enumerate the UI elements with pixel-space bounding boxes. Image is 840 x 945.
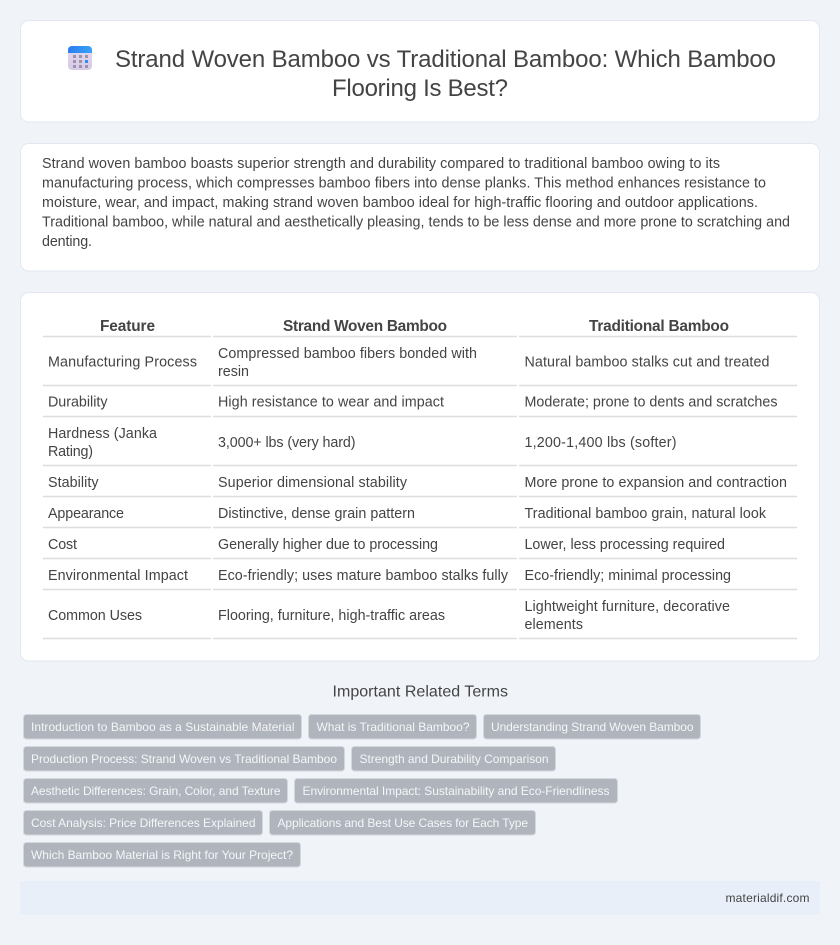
row: cost: Generally higher due to processing [218,537,438,553]
tag: Production Process: Strand Woven vs Traditional Bamboo [31,752,337,766]
tag [24,810,262,835]
row: hardness [48,426,676,460]
text block: description: moisture, wear, and impact, making strand woven bamboo ideal for high-traffic flooring and outdoor applications. [42,195,758,211]
tag [24,842,300,867]
panel: header [20,20,820,122]
row: environmental impact: Environmental Impact [48,568,188,584]
text block: description: Strand woven bamboo boasts superior strength and durability compared to traditional bamboo owing to its [42,156,720,172]
row: hardness: Hardness (Janka [48,426,157,442]
tag: Cost Analysis: Price Differences Explained [31,816,256,830]
tag: Strength and Durability Comparison [360,752,548,766]
row: hardness: 3,000+ lbs (very hard) [218,435,356,451]
row: manufacturing process: Compressed bamboo fibers bonded with [218,346,477,362]
row: stability: Stability [48,475,99,491]
tag: Introduction to Bamboo as a Sustainable Material [31,720,294,734]
row: common uses: Lightweight furniture, decorative [524,599,730,615]
panel: description [20,144,820,271]
tag group: related terms [24,714,700,867]
footer: materialdif.com [726,891,810,905]
title: Flooring Is Best? [332,75,508,102]
row: durability [48,394,778,410]
tag [24,714,302,739]
row: stability [48,475,787,491]
tag: Environmental Impact: Sustainability and Eco-Friendliness [302,784,610,798]
text block: description: manufacturing process, which compresses bamboo fibers into dense planks. This method enhances resistance to [42,176,766,192]
heading: important related terms: Important Related Terms [332,684,508,700]
row: appearance: Appearance [48,506,124,522]
row: durability: Moderate; prone to dents and scratches [524,394,778,410]
row: common uses [48,599,730,633]
row: cost: Cost [48,537,77,553]
table header row [100,318,729,335]
row: durability: Durability [48,394,108,410]
title [115,46,776,102]
text block: description [42,156,790,250]
row: stability: More prone to expansion and contraction [524,475,787,491]
row: common uses: Flooring, furniture, high-traffic areas [218,608,445,624]
tag: What is Traditional Bamboo? [316,720,470,734]
row: hardness: 1,200-1,400 lbs (softer) [524,435,676,451]
icon: calendar [68,46,92,70]
row: manufacturing process: Manufacturing Process [48,354,197,370]
tag [294,778,618,803]
row: durability: High resistance to wear and impact [218,394,444,410]
row: environmental impact [48,568,731,584]
text block: description: Traditional bamboo, while natural and aesthetically pleasing, tends to be less dense and more prone to scratching and [42,214,790,230]
tag: Which Bamboo Material is Right for Your Project? [31,848,293,862]
row: environmental impact: Eco-friendly; uses mature bamboo stalks fully [218,568,509,584]
tag [24,778,288,803]
tag: Understanding Strand Woven Bamboo [491,720,694,734]
tag [24,746,344,771]
row: common uses: elements [524,617,583,633]
panel: comparison table [20,292,820,661]
table header row: Traditional Bamboo [589,318,729,335]
table header row: Feature [100,318,155,335]
tag [308,714,476,739]
tag [484,714,700,739]
row: common uses: Common Uses [48,608,142,624]
row: cost: Lower, less processing required [524,537,725,553]
tag [352,746,556,771]
table header row: Strand Woven Bamboo [283,318,447,335]
row: manufacturing process [48,346,770,380]
tag: Applications and Best Use Cases for Each Type [278,816,528,830]
tag: Aesthetic Differences: Grain, Color, and Texture [31,784,281,798]
row: hardness: Rating) [48,444,93,460]
row: appearance [48,506,767,522]
row: environmental impact: Eco-friendly; minimal processing [524,568,731,584]
title: Strand Woven Bamboo vs Traditional Bamboo: Which Bamboo [115,46,776,73]
row: appearance: Distinctive, dense grain pattern [218,506,415,522]
footer [20,881,820,915]
row: cost [48,537,725,553]
text block: description: denting. [42,234,92,250]
row: manufacturing process: resin [218,364,249,380]
row: stability: Superior dimensional stability [218,475,408,491]
row: manufacturing process: Natural bamboo stalks cut and treated [524,354,770,370]
row: appearance: Traditional bamboo grain, natural look [524,506,767,522]
tag [270,810,536,835]
